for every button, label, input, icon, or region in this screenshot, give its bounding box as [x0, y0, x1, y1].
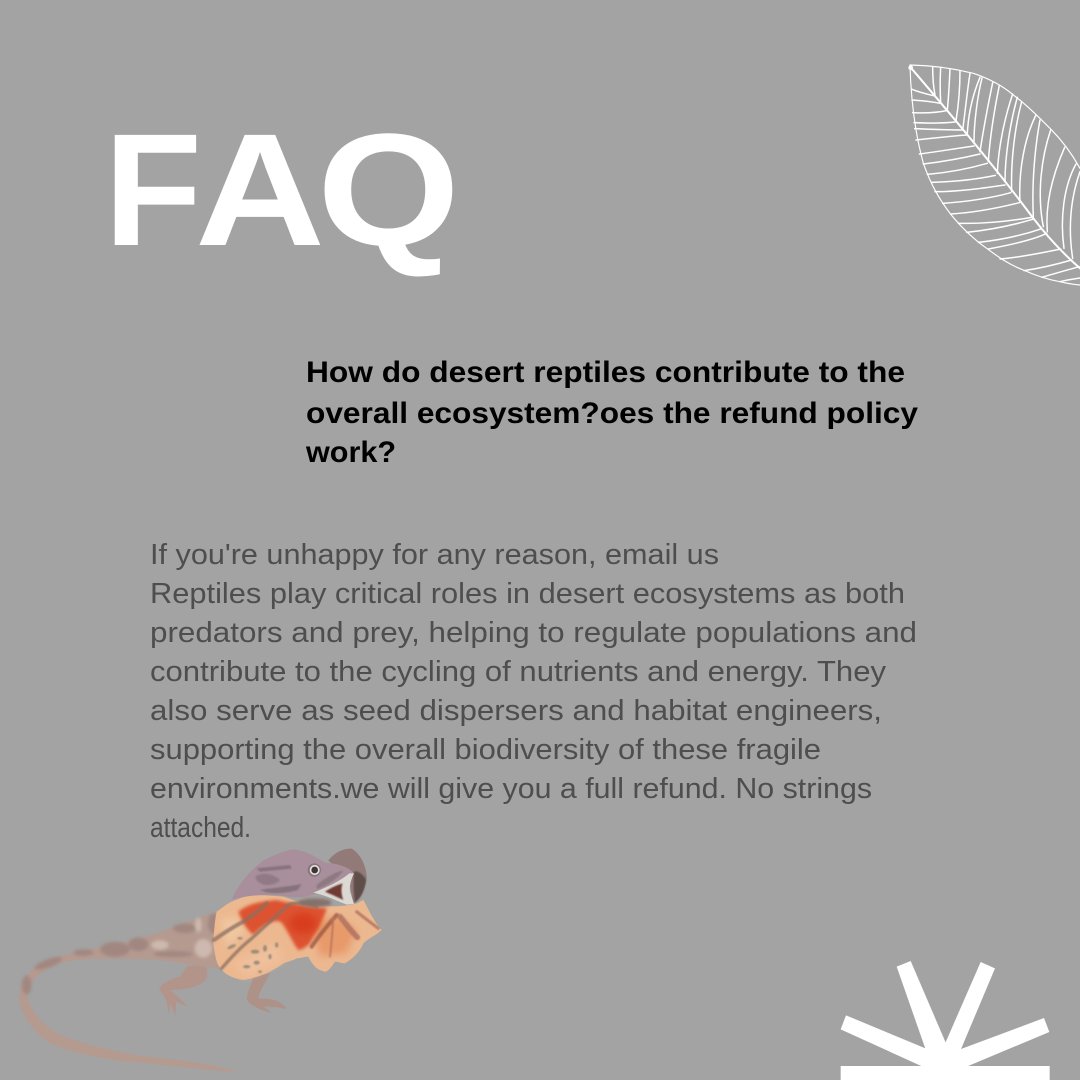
title: FAQ: Q: [317, 100, 460, 279]
lizard body and tail: [19, 912, 239, 1073]
lizard body markings: [22, 913, 219, 994]
lizard frill pale and orange washes: [220, 917, 357, 977]
lizard head shading: [255, 865, 343, 893]
icon: white sunburst: [841, 961, 1050, 1080]
title: FAQ: F: [104, 100, 202, 279]
icon: white leaf outline: [908, 65, 1080, 285]
lizard neck shadow: [298, 898, 332, 907]
answer text block: also serve as seed dispersers and habitat engineers,: [150, 695, 882, 727]
lizard head: [232, 849, 354, 900]
lizard frill red patch: [238, 900, 327, 950]
illustration: frilled lizard: [19, 849, 382, 1073]
question heading: overall ecosystem?oes the refund policy: [306, 397, 919, 430]
lizard mouth: [313, 873, 354, 905]
question heading: [305, 356, 919, 469]
answer text block: [150, 539, 917, 844]
answer text block: predators and prey, helping to regulate populations and: [150, 617, 917, 649]
answer text block: attached.: [150, 812, 251, 844]
lizard hind leg: [159, 963, 207, 1017]
answer text block: supporting the overall biodiversity of these fragile: [150, 734, 821, 766]
lizard frill specks: [227, 937, 278, 973]
answer text block: contribute to the cycling of nutrients and energy. They: [150, 656, 887, 688]
lizard eye: [308, 863, 321, 877]
answer text block: Reptiles play critical roles in desert ecosystems as both: [150, 578, 905, 610]
question heading: work?: [305, 436, 396, 469]
answer text block: If you're unhappy for any reason, email us: [150, 539, 719, 571]
lizard hood behind head: [328, 849, 367, 904]
lizard frill folds: [214, 903, 378, 968]
answer text block: environments.we will give you a full refund. No strings: [150, 773, 872, 805]
lizard front leg: [247, 973, 287, 1013]
title: FAQ: [104, 100, 460, 279]
lizard frill: [213, 895, 382, 980]
title: FAQ: A: [195, 100, 325, 279]
question heading: How do desert reptiles contribute to the: [306, 356, 905, 389]
